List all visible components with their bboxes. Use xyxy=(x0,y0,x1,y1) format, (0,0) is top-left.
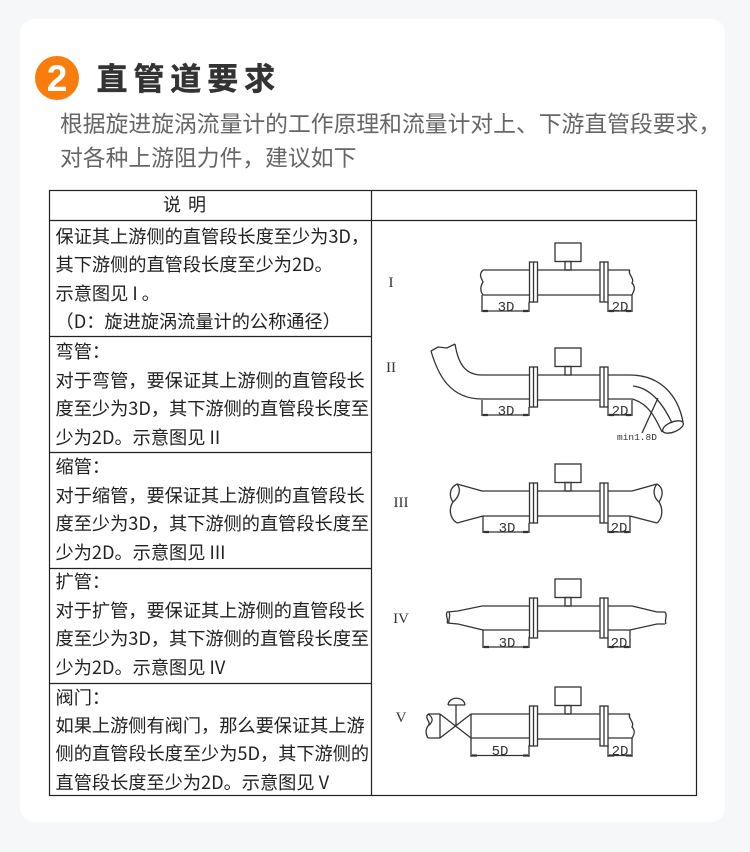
diagram II: bend pipe: 3D xyxy=(498,404,514,420)
row 2 text xyxy=(56,338,369,450)
row 4 text: 扩管： xyxy=(56,568,110,594)
intro text: 对各种上游阻力件，建议如下 xyxy=(60,145,356,171)
row 1 text: 示意图见 I 。 xyxy=(56,280,160,306)
row 1 text xyxy=(56,223,369,334)
diagram III: reducer pipe: 2D xyxy=(611,521,627,537)
row 2 text: 对于弯管，要保证其上游侧的直管段长 xyxy=(56,367,365,393)
table header: 说 明 xyxy=(163,191,206,217)
row 5 text: 如果上游侧有阀门，那么要保证其上游 xyxy=(56,712,365,738)
diagram III: reducer pipe: III xyxy=(394,495,408,511)
row 2 text: 少为2D。示意图见 II xyxy=(56,424,220,450)
diagram I: straight pipe: I xyxy=(388,275,394,291)
row 4 text: 少为2D。示意图见 IV xyxy=(56,654,226,680)
diagram I: straight pipe: 3D xyxy=(498,300,514,316)
diagram IV: expander pipe: IV xyxy=(393,611,409,627)
diagram V: valve pipe: 5D xyxy=(492,744,508,760)
row 3 text xyxy=(56,453,369,565)
title: 直管道要求 xyxy=(96,54,281,99)
row 1 text: 其下游侧的直管段长度至少为2D。 xyxy=(56,251,333,277)
row 3 text: 少为2D。示意图见 III xyxy=(56,539,225,565)
diagram V: valve pipe xyxy=(396,687,634,760)
diagram II: bend pipe: II xyxy=(386,360,396,376)
diagram II: bend pipe: 2D xyxy=(612,404,628,420)
row 4 text: 度至少为3D，其下游侧的直管段长度至 xyxy=(56,625,369,651)
diagram IV: expander pipe xyxy=(393,579,666,652)
diagram V: valve pipe: 2D xyxy=(612,744,628,760)
row 5 text xyxy=(56,684,369,795)
diagram IV: expander pipe: 3D xyxy=(499,636,515,652)
row 1 text: （D：旋进旋涡流量计的公称通径） xyxy=(56,308,341,334)
diagram I: straight pipe xyxy=(388,243,634,316)
row 3 text: 对于缩管，要保证其上游侧的直管段长 xyxy=(56,482,365,508)
diagram I: straight pipe: 2D xyxy=(612,300,628,316)
diagram II: bend pipe xyxy=(386,344,685,443)
row 2 text: 度至少为3D，其下游侧的直管段长度至 xyxy=(56,395,369,421)
icon: number badge xyxy=(35,56,79,100)
row 1 text: 保证其上游侧的直管段长度至少为3D， xyxy=(56,223,369,249)
intro text: 根据旋进旋涡流量计的工作原理和流量计对上、下游直管段要求， xyxy=(60,111,721,137)
row 3 text: 度至少为3D，其下游侧的直管段长度至 xyxy=(56,510,369,536)
row 4 text: 对于扩管，要保证其上游侧的直管段长 xyxy=(56,597,365,623)
row 5 text: 直管段长度至少为2D。示意图见 V xyxy=(56,769,330,795)
row 5 text: 侧的直管段长度至少为5D，其下游侧的 xyxy=(56,740,369,766)
intro text xyxy=(60,111,721,171)
diagram V: valve pipe: V xyxy=(396,710,407,726)
diagram III: reducer pipe xyxy=(394,464,662,537)
diagram IV: expander pipe: 2D xyxy=(611,636,627,652)
icon: number badge: 2 xyxy=(47,58,67,99)
row 4 text xyxy=(56,568,369,680)
table frame xyxy=(50,190,696,796)
diagram III: reducer pipe: 3D xyxy=(499,521,515,537)
row 2 text: 弯管： xyxy=(56,338,110,364)
row 3 text: 缩管： xyxy=(56,453,110,479)
diagram II: bend pipe: min1.8D xyxy=(617,432,657,443)
section heading xyxy=(35,54,281,100)
row 5 text: 阀门： xyxy=(56,684,110,710)
